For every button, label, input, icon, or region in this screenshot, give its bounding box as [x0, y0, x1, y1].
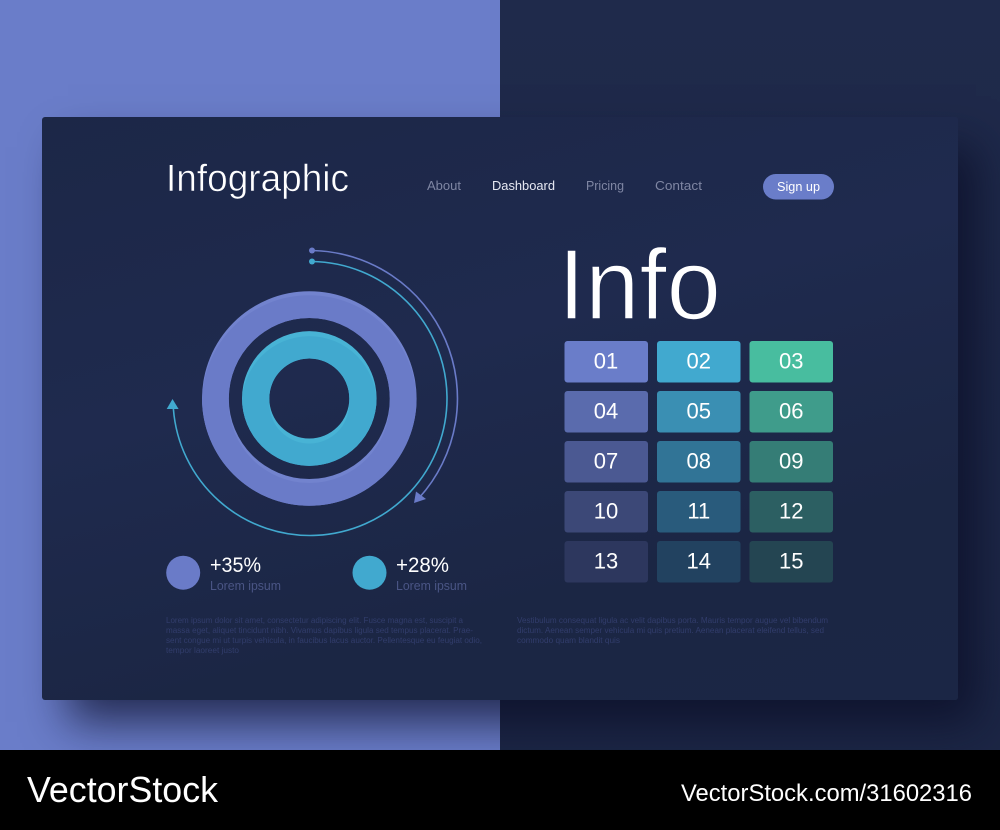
- tile 14: 14: [687, 548, 711, 574]
- paragraph: left: Lorem ipsum dolor sit amet, consectetur adipiscing elit. Fusce magna est, suscipit a: [166, 616, 464, 625]
- tile 11: 11: [687, 498, 710, 524]
- title: Infographic: [166, 158, 349, 200]
- tile 07: [564, 441, 648, 482]
- tile 06: [750, 391, 833, 432]
- heading: Info: Info: [558, 229, 721, 341]
- tile 10: [564, 491, 648, 532]
- tile 15: [750, 541, 833, 582]
- paragraph: right: commodo quam blandit quis: [517, 636, 620, 645]
- watermark: image url: VectorStock.com/31602316: [681, 780, 972, 807]
- paragraph: right: dictum. Aenean semper vehicula mi quis pretium. Aenean placerat eleifend tellus, sed: [517, 626, 824, 635]
- inner ring: [242, 331, 377, 466]
- outer ring: [202, 291, 417, 506]
- footer: black watermark bar: [0, 750, 1000, 830]
- tile 12: 12: [779, 498, 804, 524]
- tile 04: 04: [594, 398, 618, 424]
- tile 09: [750, 441, 833, 482]
- tile 02: [657, 341, 740, 382]
- watermark: VectorStock logo: VectorStock: [27, 769, 219, 810]
- tile 01: [564, 341, 648, 382]
- donut chart: [202, 291, 417, 506]
- tile 04: [564, 391, 648, 432]
- tile 13: [564, 541, 648, 582]
- tile 02: 02: [687, 348, 711, 374]
- tile 10: 10: [594, 498, 618, 524]
- panel: main card: [42, 117, 958, 700]
- nav item: Dashboard: Dashboard: [492, 178, 555, 193]
- tile 05: [657, 391, 740, 432]
- tile 08: [657, 441, 740, 482]
- tile 08: 08: [687, 448, 711, 474]
- navigation menu: [427, 178, 702, 193]
- tile 15: 15: [779, 548, 804, 574]
- tile 01: 01: [594, 348, 618, 374]
- sign up button: [763, 174, 834, 200]
- arc arrow: periwinkle: [309, 248, 457, 503]
- number grid: [564, 341, 833, 582]
- background: right navy half: [500, 0, 1000, 750]
- tile 09: 09: [779, 448, 804, 474]
- tile 06: 06: [779, 398, 804, 424]
- tile 12: [750, 491, 833, 532]
- paragraph: right: Vestibulum consequat ligula ac velit dapibus porta. Mauris tempor augue vel bibendum: [517, 616, 828, 625]
- tile 03: [750, 341, 833, 382]
- nav item: Contact: Contact: [655, 178, 702, 193]
- paragraph: left: massa eget, aliquet tincidunt nibh. Vivamus dapibus ligula sed tempus placerat. Prae-: [166, 626, 473, 635]
- arc arrow: cyan: [167, 258, 447, 535]
- tile 03: 03: [779, 348, 804, 374]
- paragraph: right: [517, 616, 828, 645]
- tile 07: 07: [594, 448, 618, 474]
- stat: +28%: [352, 554, 467, 593]
- stat: +28%: +28%: [396, 554, 449, 577]
- nav item: Pricing: Pricing: [586, 178, 624, 193]
- tile 13: 13: [594, 548, 618, 574]
- stat: +28%: Lorem ipsum: [396, 578, 467, 593]
- sign up button: Sign up: [777, 179, 820, 194]
- stat: +35%: +35%: [210, 554, 261, 577]
- stat: +35%: Lorem ipsum: [210, 578, 281, 593]
- paragraph: left: sent congue mi ut turpis vehicula, in faucibus lacus auctor. Pellentesque eu feugiat odio,: [166, 636, 482, 645]
- tile 11: [657, 491, 740, 532]
- stat: +35%: [166, 554, 281, 593]
- tile 05: 05: [687, 398, 711, 424]
- tile 14: [657, 541, 740, 582]
- paragraph: left: [166, 616, 482, 655]
- paragraph: left: tempor laoreet justo: [166, 646, 240, 655]
- nav item: About: About: [427, 178, 461, 193]
- background: left periwinkle half: [0, 0, 500, 750]
